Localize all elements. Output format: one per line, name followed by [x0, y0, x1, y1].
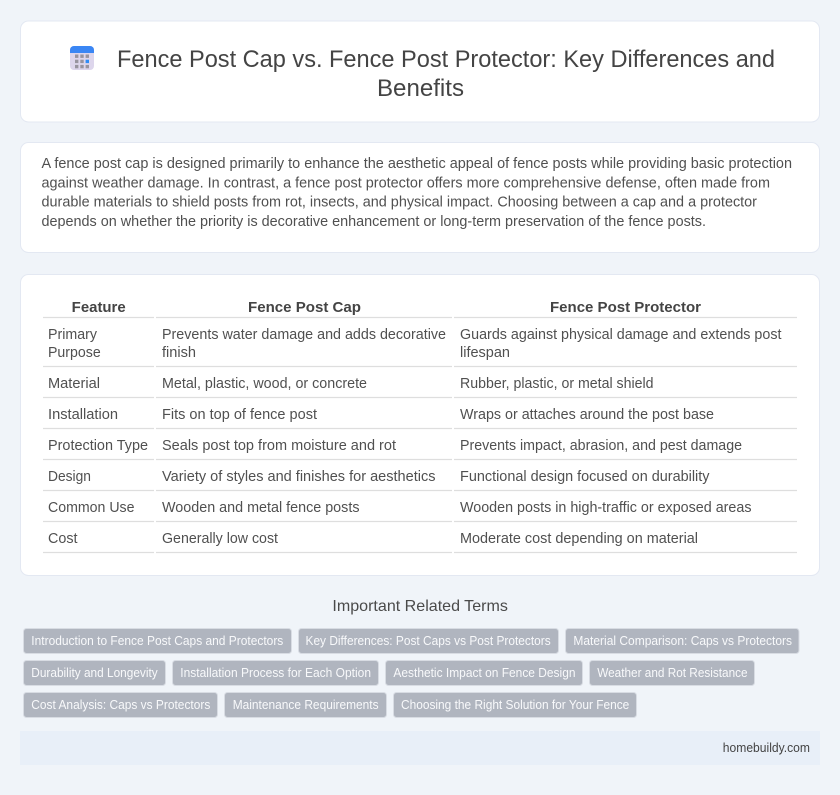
table row: material: Rubber, plastic, or metal shield — [460, 376, 654, 392]
tag list: related terms: Durability and Longevity — [31, 666, 158, 680]
tag list: related terms: Choosing the Right Solution for Your Fence — [401, 698, 629, 712]
table row: common use: Wooden posts in high-traffic or exposed areas — [460, 500, 752, 516]
text block: description paragraph: A fence post cap is designed primarily to enhance the aesthetic appeal of fence posts while providing basic protection — [42, 156, 792, 172]
tag list: related terms: Aesthetic Impact on Fence Design — [393, 666, 576, 680]
table row: design: Variety of styles and finishes for aesthetics — [162, 469, 436, 485]
table row: design: Design — [48, 469, 91, 485]
footer: homebuildy.com — [723, 740, 810, 755]
table row: cost — [43, 531, 797, 552]
table row: cost: Moderate cost depending on material — [460, 531, 698, 547]
text block: description paragraph — [42, 156, 792, 230]
table row: installation: Installation — [48, 407, 118, 423]
tag list: related terms: Cost Analysis: Caps vs Protectors — [31, 698, 210, 712]
table header row — [43, 300, 797, 318]
table row: material: Metal, plastic, wood, or concrete — [162, 376, 367, 392]
table row: protection type: Seals post top from moisture and rot — [162, 438, 396, 454]
table row: primary purpose — [43, 327, 797, 366]
table row: cost: Cost — [48, 531, 78, 547]
heading: important related terms: Important Related Terms — [332, 598, 508, 615]
table row: common use — [43, 500, 797, 522]
table row: common use: Wooden and metal fence posts — [162, 500, 360, 516]
table header row: Feature — [72, 300, 126, 316]
title: Fence Post Cap vs. Fence Post Protector: Key Differences and — [117, 46, 775, 73]
text block: description paragraph: depends on whether the priority is decorative enhancement or long-term preservation of the fence posts. — [42, 214, 706, 230]
table row: primary purpose: Purpose — [48, 345, 101, 361]
table header row: Fence Post Cap — [248, 300, 361, 316]
text block: description paragraph: durable materials to shield posts from rot, insects, and physical impact. Choosing between a cap and a protector — [42, 195, 757, 211]
title: Benefits — [377, 75, 464, 102]
table row: installation — [43, 407, 797, 428]
table row: protection type — [43, 438, 797, 460]
table row: installation: Wraps or attaches around the post base — [460, 407, 714, 423]
table header row: Fence Post Protector — [550, 300, 701, 316]
tag list: related terms: Maintenance Requirements — [233, 698, 379, 712]
tag list: related terms: Weather and Rot Resistance — [597, 666, 748, 680]
table row: primary purpose: Prevents water damage and adds decorative — [162, 327, 446, 343]
panel: title card — [20, 21, 820, 122]
table row: protection type: Protection Type — [48, 438, 148, 454]
table row: primary purpose: Primary — [48, 327, 98, 343]
table row: design: Functional design focused on durability — [460, 469, 710, 485]
table row: common use: Common Use — [48, 500, 134, 516]
title — [117, 46, 775, 102]
table row: primary purpose: finish — [162, 345, 196, 361]
tag list: related terms: Key Differences: Post Caps vs Post Protectors — [306, 634, 551, 648]
tag list: related terms — [24, 628, 799, 718]
table row: material: Material — [48, 376, 100, 392]
table row: primary purpose: lifespan — [460, 345, 510, 361]
text block: description paragraph: against weather damage. In contrast, a fence post protector offers more comprehensive defense, often made from — [42, 175, 770, 191]
tag list: related terms: Introduction to Fence Post Caps and Protectors — [31, 634, 283, 648]
table row: cost: Generally low cost — [162, 531, 278, 547]
icon: calendar — [70, 46, 94, 70]
table row: material — [43, 376, 797, 398]
table row: design — [43, 469, 797, 490]
footer — [20, 731, 820, 765]
tag list: related terms: Installation Process for Each Option — [180, 666, 371, 680]
panel: comparison table — [20, 274, 820, 576]
table row: primary purpose: Guards against physical damage and extends post — [460, 327, 782, 343]
tag list: related terms: Material Comparison: Caps vs Protectors — [573, 634, 792, 648]
table row: protection type: Prevents impact, abrasion, and pest damage — [460, 438, 742, 454]
table row: installation: Fits on top of fence post — [162, 407, 317, 423]
panel: description — [20, 142, 820, 252]
